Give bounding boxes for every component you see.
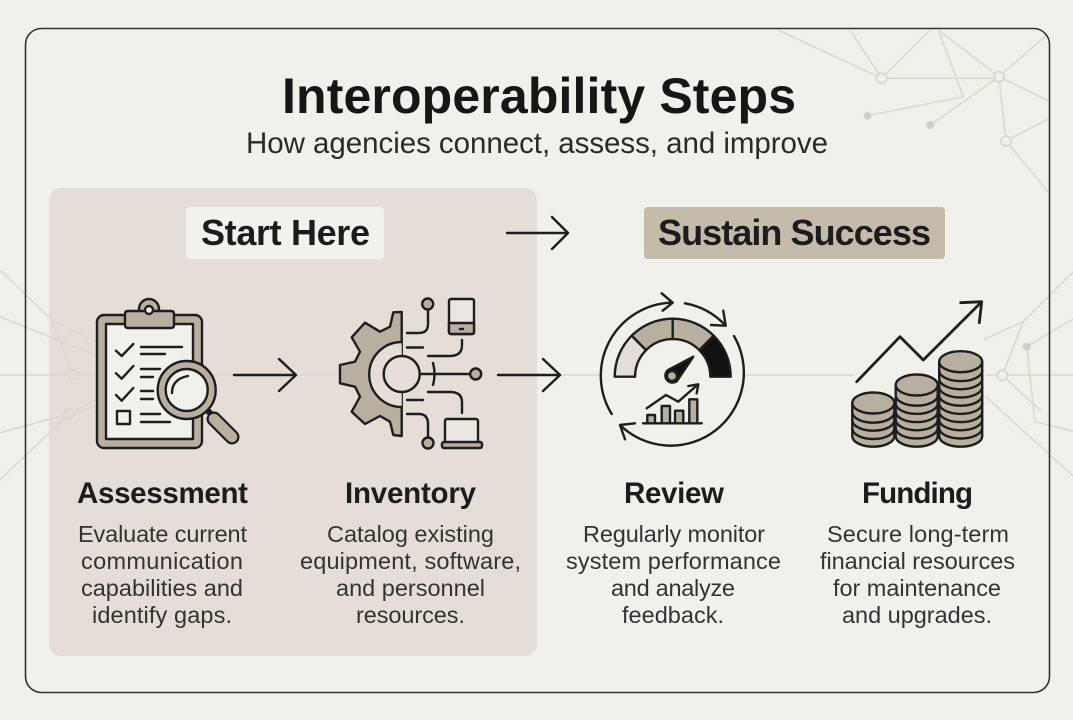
step: assessment: Evaluate current xyxy=(78,521,247,547)
step: inventory: and personnel xyxy=(336,575,485,601)
step: review: feedback. xyxy=(622,602,724,628)
step: funding: Funding xyxy=(862,477,973,510)
icon: gear and devices xyxy=(340,298,482,448)
icon: clipboard with magnifier xyxy=(97,299,232,448)
icon: coin stacks with rising arrow xyxy=(852,302,982,447)
step: funding: for maintenance xyxy=(833,575,1001,601)
coins: short stack xyxy=(852,392,894,447)
background network: left xyxy=(0,270,97,480)
title: Interoperability Steps xyxy=(282,68,796,124)
step: funding: financial resources xyxy=(820,548,1015,574)
step: review: system performance xyxy=(566,548,781,574)
arrow: inventory to review xyxy=(498,359,560,391)
step: funding: Secure long-term xyxy=(827,521,1009,547)
coins: tall stack xyxy=(939,351,982,447)
step: inventory xyxy=(300,477,521,628)
step: assessment: identify gaps. xyxy=(92,602,232,628)
step: inventory: Catalog existing xyxy=(327,521,494,547)
step: review: and analyze xyxy=(611,575,735,601)
badge: sustain success: Sustain Success xyxy=(658,212,931,253)
step: inventory: Inventory xyxy=(345,477,477,510)
coins: middle stack xyxy=(896,374,938,447)
step: review: Regularly monitor xyxy=(583,521,765,547)
step: funding: and upgrades. xyxy=(842,602,992,628)
step: review xyxy=(566,477,781,628)
background network: right xyxy=(984,272,1073,476)
badge: start here: Start Here xyxy=(201,212,370,253)
step: review: Review xyxy=(624,477,724,510)
step: assessment: Assessment xyxy=(77,477,248,510)
step: funding xyxy=(820,477,1015,628)
icon: gauge with cycle arrows xyxy=(601,293,744,446)
arrow: assessment to inventory xyxy=(234,359,296,391)
panel: start here highlight xyxy=(49,188,537,656)
step: inventory: equipment, software, xyxy=(300,548,521,574)
background network: top right xyxy=(778,30,1048,192)
step: assessment xyxy=(77,477,248,628)
badge: start here xyxy=(186,207,384,259)
center connector line xyxy=(202,374,855,376)
arrow: between badges xyxy=(507,217,568,249)
step: assessment: communication xyxy=(81,548,243,574)
step: assessment: capabilities and xyxy=(81,575,243,601)
step: inventory: resources. xyxy=(356,602,465,628)
subtitle: How agencies connect, assess, and improve xyxy=(246,127,828,160)
